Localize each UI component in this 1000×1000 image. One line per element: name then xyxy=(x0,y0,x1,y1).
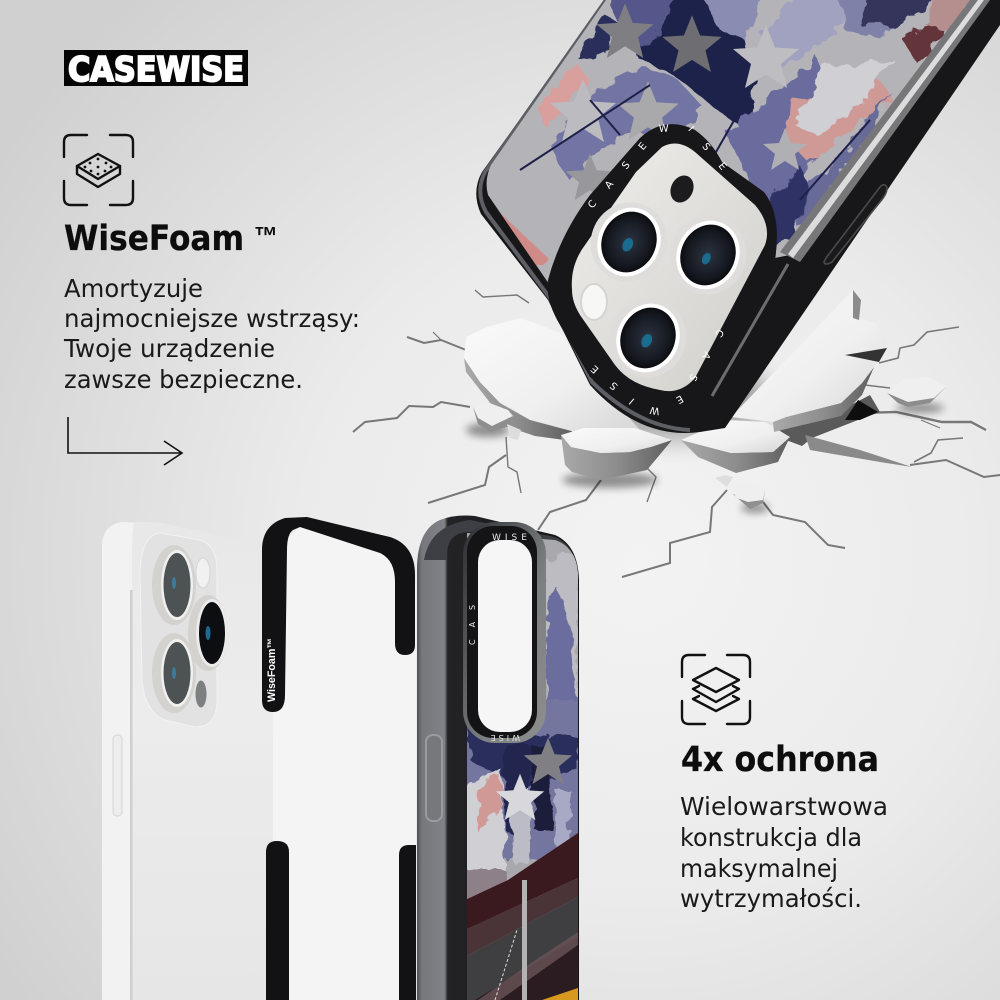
text block: WiseFoam: Twoje urządzenie xyxy=(63,334,275,363)
camera plateau xyxy=(140,533,217,727)
camera ring xyxy=(463,522,546,743)
ring text bottom: WISE xyxy=(488,733,520,742)
camera ring dark xyxy=(467,526,537,738)
ring text left: CAS xyxy=(468,593,477,645)
camera opening xyxy=(478,540,532,732)
gap dark xyxy=(845,400,878,420)
lens bezels xyxy=(152,545,228,713)
logo: CASEWISE xyxy=(68,50,244,90)
side button xyxy=(426,735,442,821)
small rubble center xyxy=(715,475,765,509)
text block: 4x ochrona: Wielowarstwowa xyxy=(680,792,888,821)
slab right xyxy=(731,290,887,432)
ring side highlight xyxy=(712,264,788,396)
foam layer bottom right strip xyxy=(399,845,416,1000)
text block: 4x ochrona xyxy=(680,792,888,913)
foam label: WiseFoam™ xyxy=(266,638,278,702)
cracked wall xyxy=(353,290,1000,577)
lens 2 xyxy=(196,599,228,667)
case print xyxy=(467,533,578,1000)
heading: WiseFoam: ™ xyxy=(254,221,278,251)
small rubble left xyxy=(473,402,521,440)
clear strip along right side xyxy=(780,0,990,262)
microphone hole xyxy=(666,172,698,206)
lens bottom xyxy=(597,286,699,390)
camera ring xyxy=(548,124,777,414)
flash xyxy=(581,284,607,320)
ring text top: WISE xyxy=(492,533,531,543)
side band xyxy=(102,522,134,1000)
slab center left xyxy=(561,428,672,480)
icon: layers xyxy=(682,655,750,724)
phone lower right: case xyxy=(417,516,585,1000)
foam layer bottom left strip xyxy=(266,841,289,1000)
heading: 4x ochrona: 4x ochrona xyxy=(681,740,879,780)
text block: WiseFoam xyxy=(63,274,360,394)
text block: 4x ochrona: maksymalnej xyxy=(680,854,838,883)
arrow xyxy=(68,417,182,465)
ring text top: CASEWISE xyxy=(588,124,728,208)
text block: 4x ochrona: konstrukcja dla xyxy=(680,823,862,852)
pebble right xyxy=(887,377,946,407)
side button xyxy=(824,185,887,264)
case body xyxy=(417,516,579,1000)
foam white sheet xyxy=(273,527,416,1000)
text block: WiseFoam: Amortyzuje xyxy=(64,274,203,303)
text block: WiseFoam: najmocniejsze wstrząsy: xyxy=(64,304,360,333)
left edge highlight xyxy=(480,0,690,430)
heading: WiseFoam: WiseFoam xyxy=(64,219,244,259)
icon: foam xyxy=(64,135,133,205)
side button xyxy=(113,735,122,816)
soft shadow under phone xyxy=(565,360,775,440)
case print xyxy=(486,0,970,282)
gap right xyxy=(773,395,880,446)
phone lower left: white iPhone xyxy=(102,522,274,1000)
text block: 4x ochrona: wytrzymałości. xyxy=(680,884,862,913)
wedge xyxy=(805,435,912,467)
phone body xyxy=(102,522,274,1000)
rubble shadows xyxy=(466,403,944,513)
phone top: case on wall xyxy=(476,0,1000,433)
ring text xyxy=(588,124,728,416)
lens 1 xyxy=(161,550,193,620)
slab left xyxy=(464,318,640,441)
lens right xyxy=(657,203,759,307)
case body xyxy=(476,0,1000,433)
camera plateau xyxy=(572,143,767,391)
slab center right xyxy=(681,420,790,473)
wall cracks xyxy=(353,290,1000,577)
microphone xyxy=(196,680,206,708)
case top edge xyxy=(424,520,578,575)
lens 3 xyxy=(161,639,193,707)
ring text bottom: CASEWISE xyxy=(590,330,724,416)
flash xyxy=(196,558,210,588)
lens top left xyxy=(578,190,680,294)
text block: WiseFoam: zawsze bezpieczne. xyxy=(64,365,303,394)
foam layer top piece xyxy=(262,517,415,712)
